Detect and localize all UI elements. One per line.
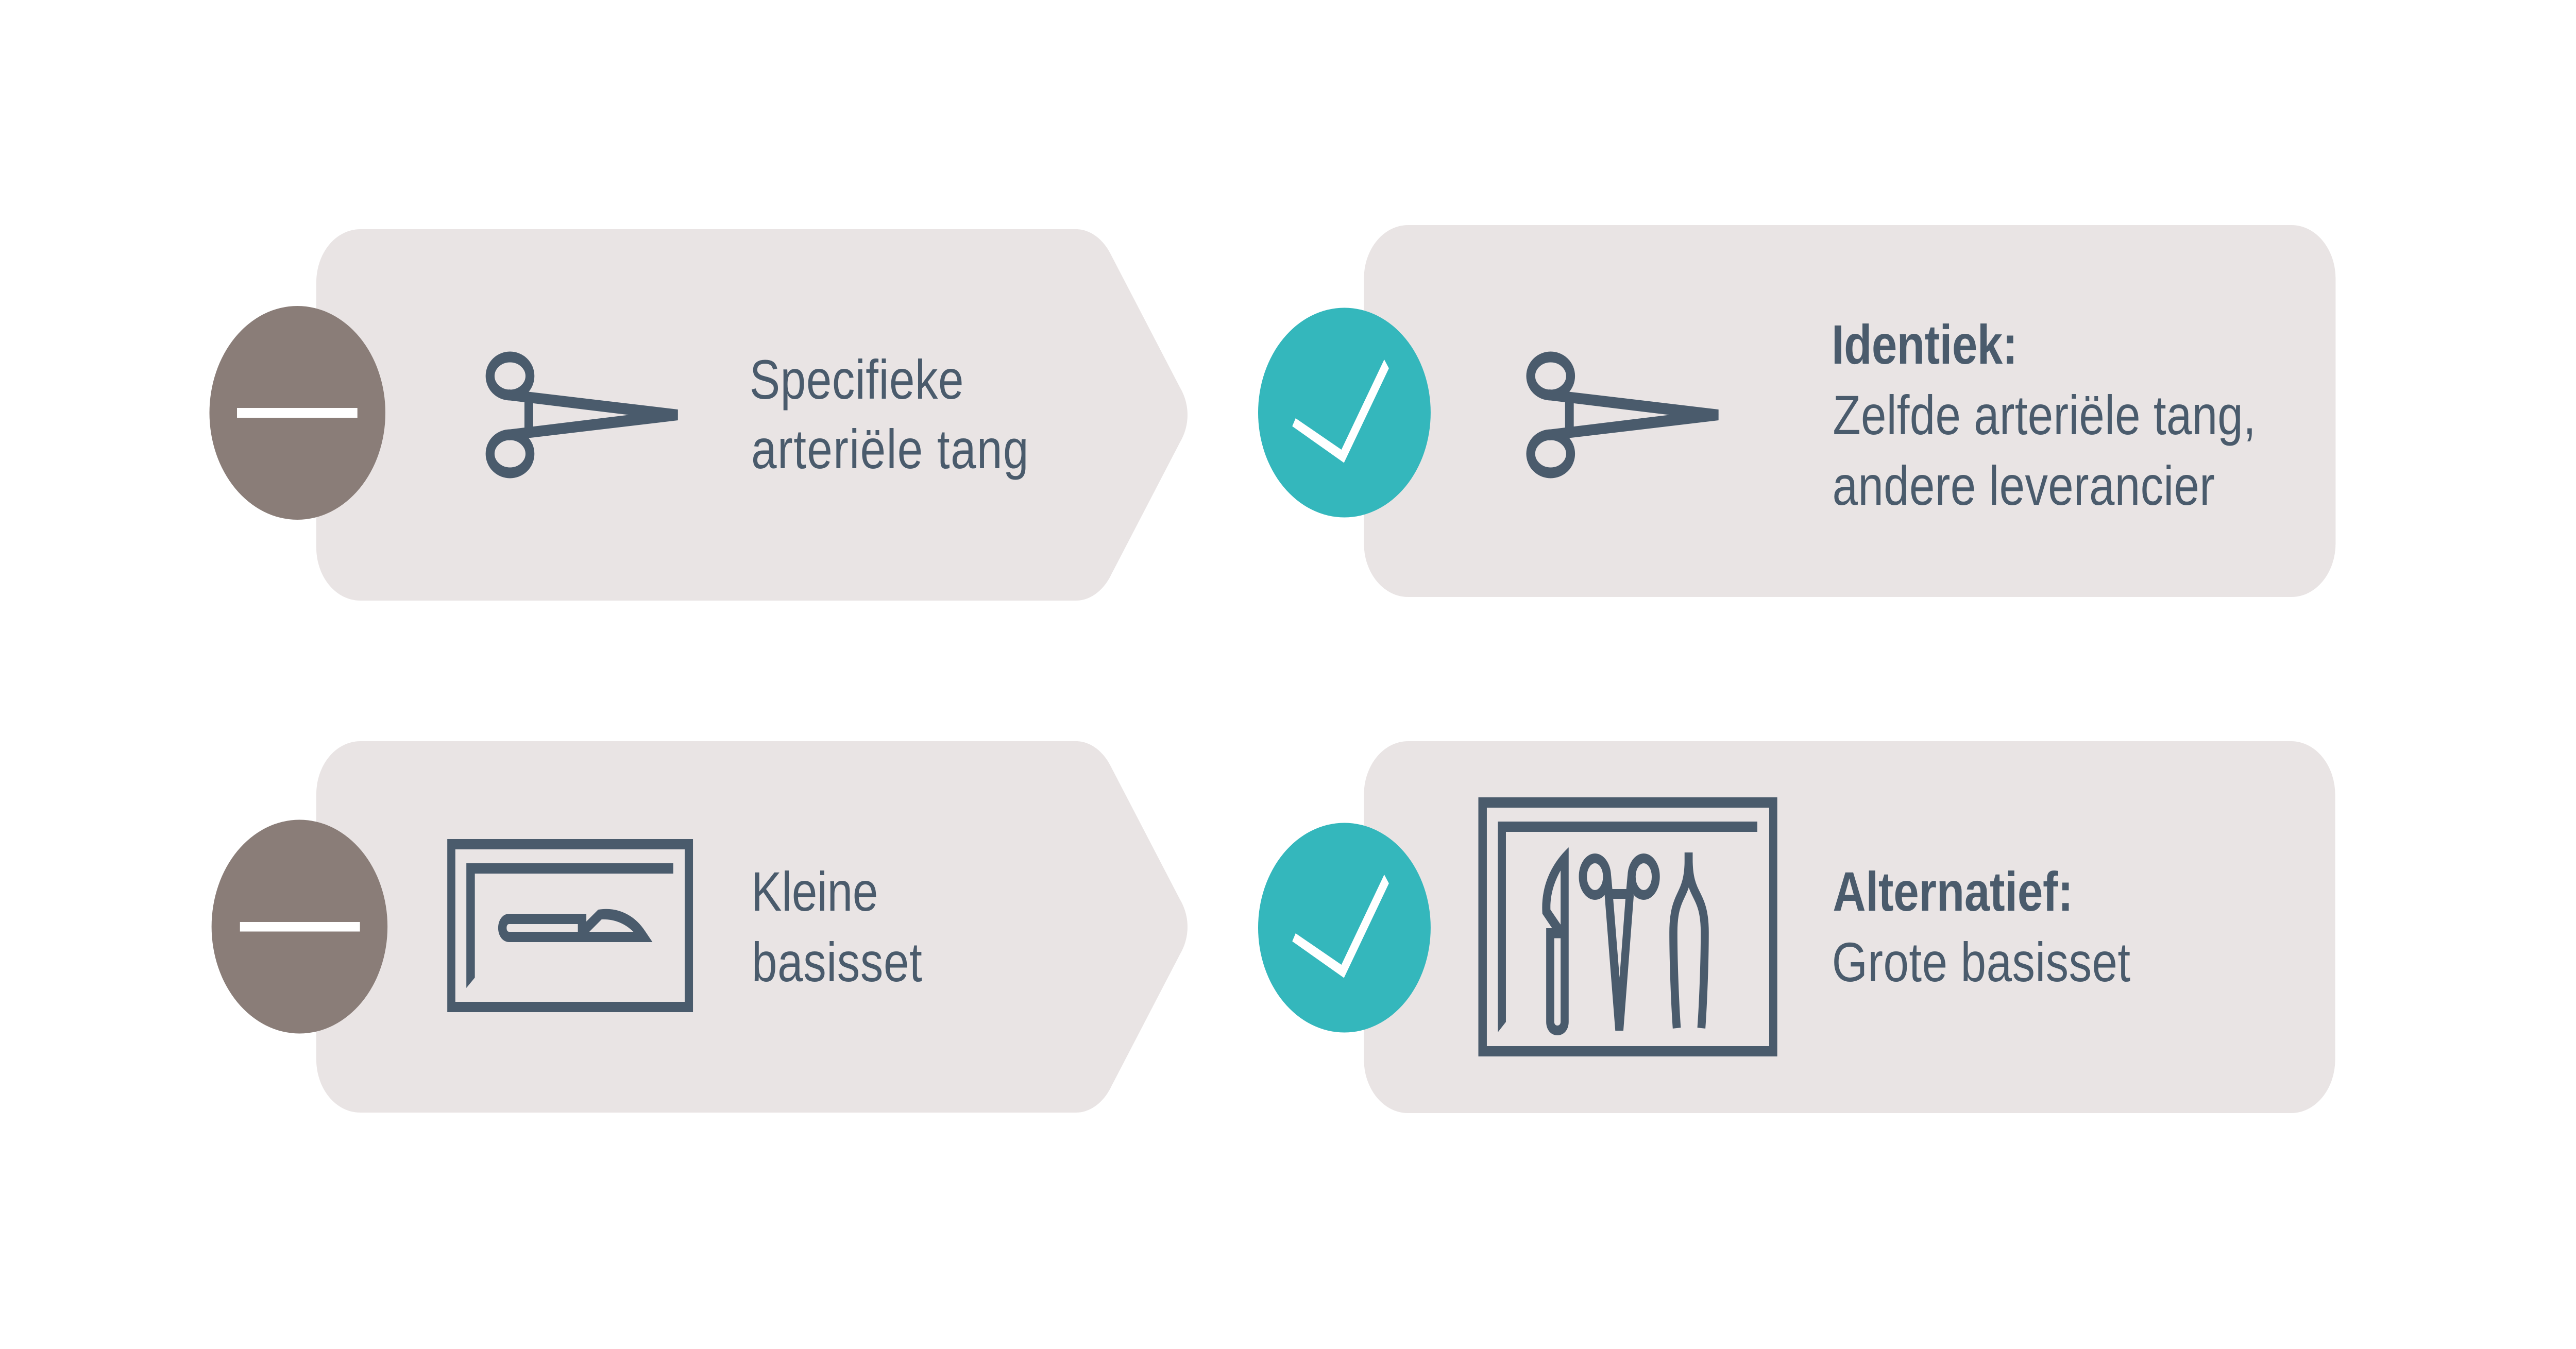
label: Alternatief: Alternatief:	[1833, 860, 2073, 923]
label: Alternatief	[1832, 860, 2130, 993]
icon: kit with scalpel	[447, 839, 693, 1012]
label: Kleine basisset	[751, 860, 922, 993]
label: Specifieke arteriële tang	[750, 348, 1028, 480]
icon: scalpel	[1542, 847, 1569, 1035]
label: Alternatief: Grote basisset	[1832, 931, 2130, 993]
icon: arterial forceps	[490, 357, 678, 473]
arrow panel shape	[316, 229, 1188, 601]
minus badge	[210, 306, 385, 520]
check badge	[1258, 308, 1431, 517]
check badge	[1258, 823, 1431, 1032]
label: Identiek: andere leverancier	[1833, 454, 2215, 517]
icon: forceps	[1583, 858, 1656, 1031]
panel: identical forceps	[1258, 225, 2335, 597]
label: Specifieke arteriële tang: Specifieke	[750, 348, 963, 411]
icon: large kit	[1478, 797, 1777, 1056]
icon: tweezers	[1673, 852, 1705, 1028]
label: Identiek: Identiek:	[1832, 313, 2018, 375]
label: Kleine basisset: Kleine	[751, 860, 878, 923]
label: Kleine basisset: basisset	[752, 931, 922, 993]
icon: arterial forceps	[1531, 357, 1719, 473]
label: Identiek	[1832, 313, 2256, 517]
arrow panel shape	[316, 741, 1188, 1113]
label: Identiek: Zelfde arteriële tang,	[1833, 384, 2256, 446]
panel: alternative large set	[1258, 741, 2335, 1113]
rounded panel shape	[1364, 741, 2335, 1113]
minus badge	[212, 820, 387, 1033]
panel: small basic set	[212, 741, 1188, 1113]
label: Specifieke arteriële tang: arteriële tang	[751, 418, 1028, 480]
rounded panel shape	[1364, 225, 2335, 597]
panel: specific arterial forceps	[210, 229, 1188, 601]
